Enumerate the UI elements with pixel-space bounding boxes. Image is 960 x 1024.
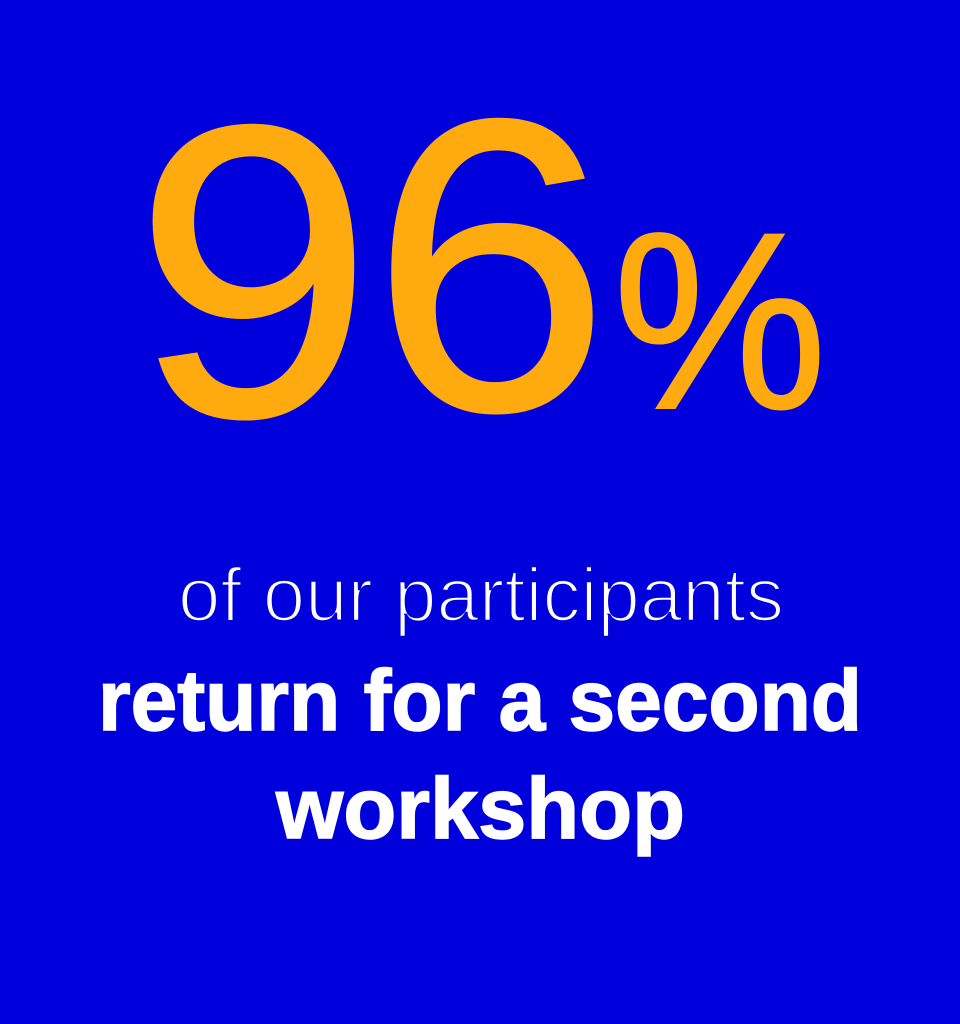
caption line: workshop: workshop xyxy=(275,761,685,857)
caption xyxy=(98,553,862,857)
statistic: 96% xyxy=(134,33,827,503)
caption line: of our participants: of our participants xyxy=(178,553,784,638)
digit 9: 9 xyxy=(134,39,373,503)
percent sign: % xyxy=(613,181,827,462)
caption line: return for a second: return for a second xyxy=(98,653,862,749)
digit 6: 6 xyxy=(371,33,610,497)
